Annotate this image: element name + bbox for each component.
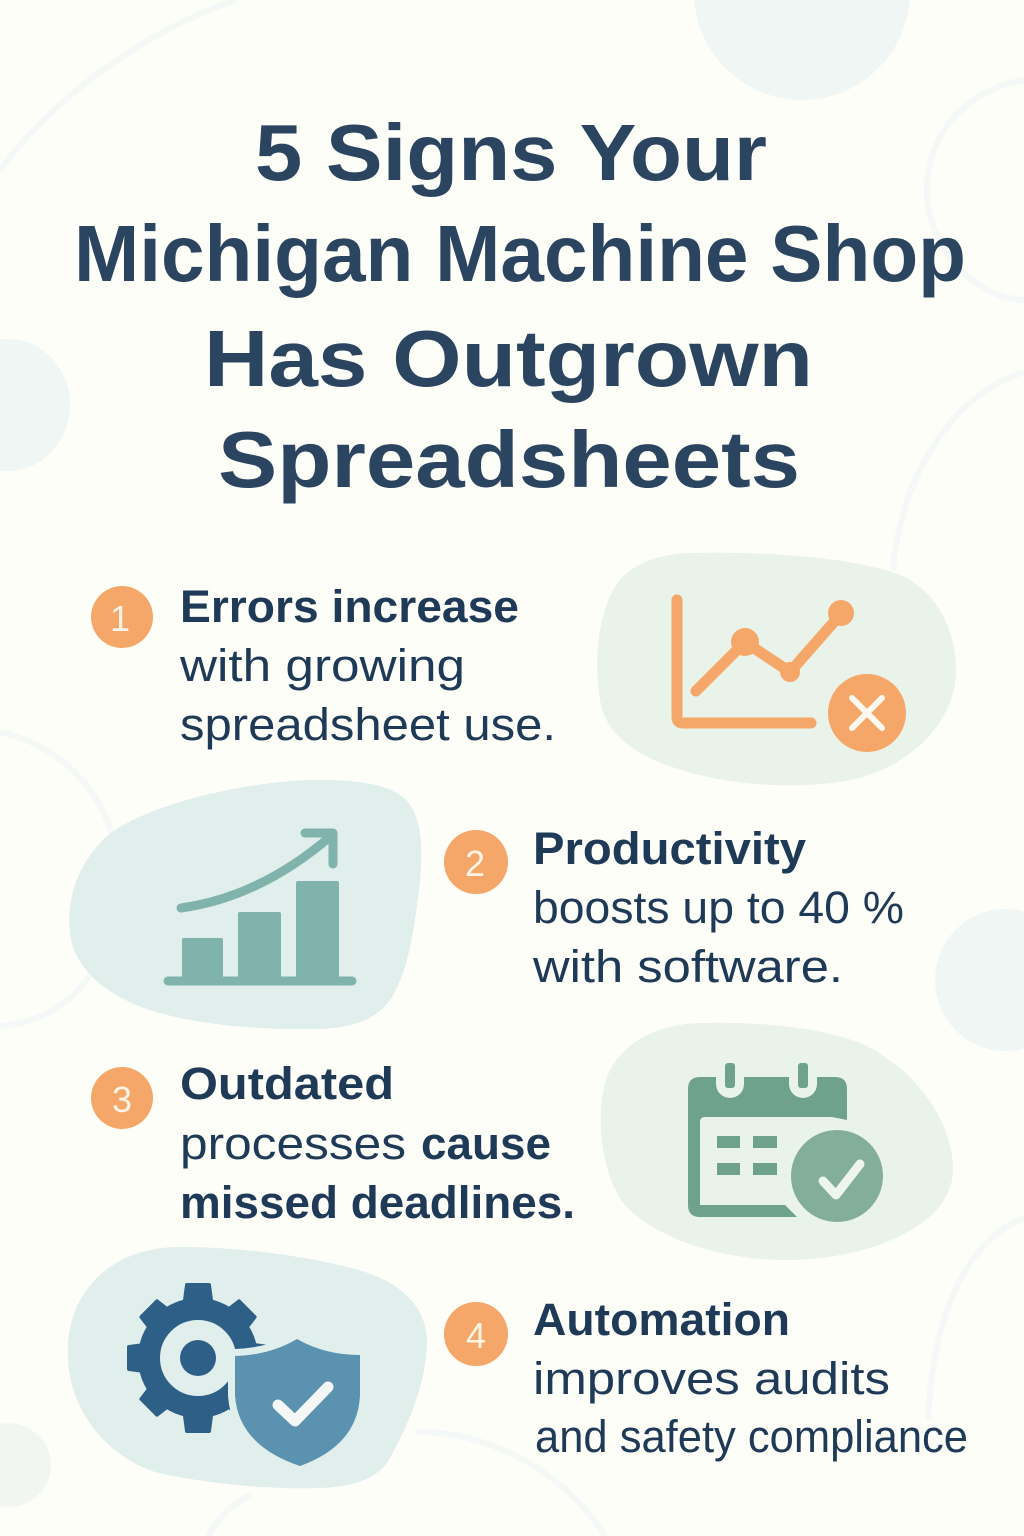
text: sign 3: processes (180, 1118, 406, 1169)
text: sign 2: boosts up to 40 % (533, 882, 904, 933)
panel: sign 4 automation (68, 1247, 968, 1488)
text: sign 1: with growing (179, 640, 465, 691)
title: Spreadsheets (218, 415, 800, 504)
icon blob: growing bar chart (69, 780, 421, 1029)
text: sign 4 (533, 1294, 968, 1462)
text: sign 1: Errors increase (180, 581, 519, 632)
number badge 1: 1 (110, 598, 130, 639)
number badge 3 (91, 1067, 153, 1129)
text: sign 3 (180, 1058, 575, 1228)
number badge 3: 3 (112, 1079, 132, 1120)
title: 5 Signs Your (255, 108, 767, 197)
text: sign 3: missed deadlines. (180, 1177, 575, 1228)
text: sign 4: Automation (533, 1294, 790, 1345)
number badge 4 (444, 1302, 508, 1366)
text: sign 4: improves audits (533, 1353, 890, 1404)
title: Michigan Machine Shop (74, 209, 966, 298)
text: sign 3: Outdated (180, 1058, 394, 1109)
icon blob: gear and shield (68, 1247, 427, 1488)
text: sign 2: with software. (532, 941, 843, 992)
icon blob: line chart with error mark (597, 553, 956, 785)
text: sign 2 (532, 823, 904, 992)
number badge 2: 2 (465, 843, 485, 884)
title (74, 108, 966, 504)
number badge 4: 4 (466, 1315, 486, 1356)
panel: sign 1 errors (91, 553, 956, 785)
panel: sign 3 deadlines (91, 1023, 953, 1260)
text: sign 1 (179, 581, 556, 750)
number badge 1 (91, 586, 153, 648)
panel: sign 2 productivity (69, 780, 904, 1029)
text: sign 4: and safety compliance (535, 1411, 968, 1462)
title: Has Outgrown (204, 314, 813, 403)
text: sign 1: spreadsheet use. (180, 699, 556, 750)
text: sign 3: cause (421, 1118, 551, 1169)
number badge 2 (444, 830, 508, 894)
icon blob: calendar with check (601, 1023, 953, 1260)
text: sign 2: Productivity (533, 823, 806, 874)
